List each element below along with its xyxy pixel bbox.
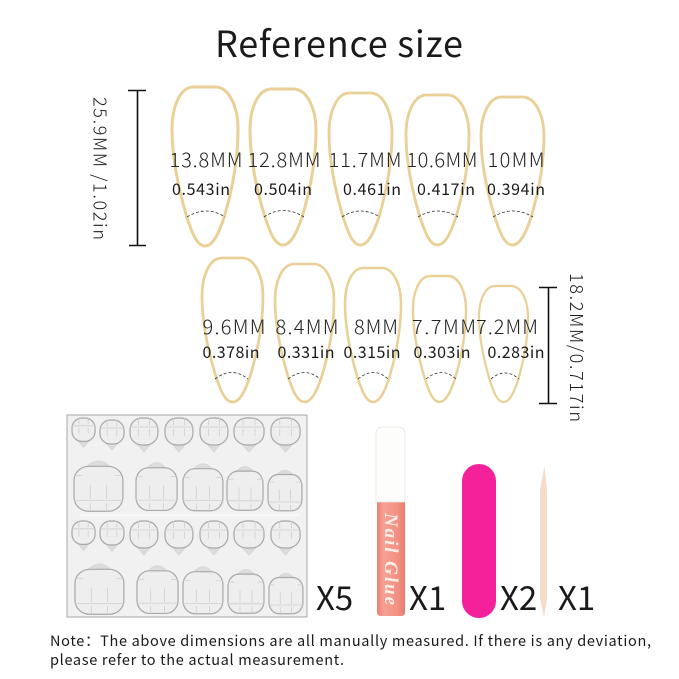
nail 5 bottom row — [476, 286, 544, 402]
nail 2 top row: 12.8MM — [248, 144, 320, 173]
icon: nail file — [462, 464, 496, 618]
title: Reference size — [215, 16, 463, 68]
nail 1 top row: 0.543in — [172, 176, 230, 200]
nail 4 bottom row: 7.7MM — [412, 311, 476, 340]
nail 4 bottom row — [412, 276, 476, 402]
note text: Note：The above dimensions are all manually measured. If there is any deviation, — [50, 630, 651, 651]
nail 4 top row: 0.417in — [417, 176, 475, 200]
nail 3 top row — [328, 93, 402, 245]
nail 4 top row — [406, 95, 478, 245]
nail 3 top row: 0.461in — [343, 176, 401, 200]
nail 1 bottom row — [202, 258, 266, 402]
quantity label: tabs: X5 — [316, 572, 353, 620]
nail 3 bottom row: 8MM — [354, 311, 398, 340]
nail 4 bottom row: 0.303in — [414, 339, 470, 363]
nail 2 bottom row — [275, 264, 338, 402]
dimension bracket: top row height: 25.9MM /1.02in — [88, 97, 114, 240]
panel: top row of nail sizes — [170, 87, 545, 246]
nail 1 top row — [170, 87, 242, 246]
dimension bracket: top row height — [88, 90, 146, 246]
dimension bracket: bottom row height: 18.2MM/0.717in — [564, 273, 590, 422]
nail 2 top row — [248, 89, 320, 245]
note text: please refer to the actual measurement. — [50, 649, 344, 670]
quantity label: file: X2 — [500, 572, 537, 620]
nail 5 top row: 0.394in — [487, 176, 545, 200]
nail 2 top row: 0.504in — [254, 176, 312, 200]
nail 3 bottom row — [344, 268, 401, 402]
icon: nail glue tube: Nail Glue — [380, 512, 401, 606]
quantity label: stick: X1 — [558, 572, 595, 620]
icon: nail glue tube — [376, 427, 405, 616]
quantity label: glue: X1 — [409, 572, 446, 620]
dimension bracket: bottom row height — [539, 273, 590, 422]
panel: bottom row of nail sizes — [202, 258, 544, 402]
nail 1 bottom row: 9.6MM — [202, 311, 266, 340]
nail 5 bottom row: 7.2MM — [476, 311, 538, 340]
icon: cuticle stick — [540, 466, 547, 618]
nail 3 top row: 11.7MM — [328, 144, 402, 173]
nail 1 top row: 13.8MM — [170, 144, 242, 173]
adhesive tabs sheet — [67, 415, 307, 617]
nail 2 bottom row: 8.4MM — [276, 311, 338, 340]
nail 5 top row — [481, 97, 545, 245]
nail 5 top row: 10MM — [488, 144, 544, 173]
nail 1 bottom row: 0.378in — [202, 339, 260, 363]
nail 3 bottom row: 0.315in — [344, 339, 400, 363]
note text — [50, 630, 651, 670]
nail 2 bottom row: 0.331in — [278, 339, 334, 363]
nail 4 top row: 10.6MM — [406, 144, 478, 173]
nail 5 bottom row: 0.283in — [488, 339, 544, 363]
